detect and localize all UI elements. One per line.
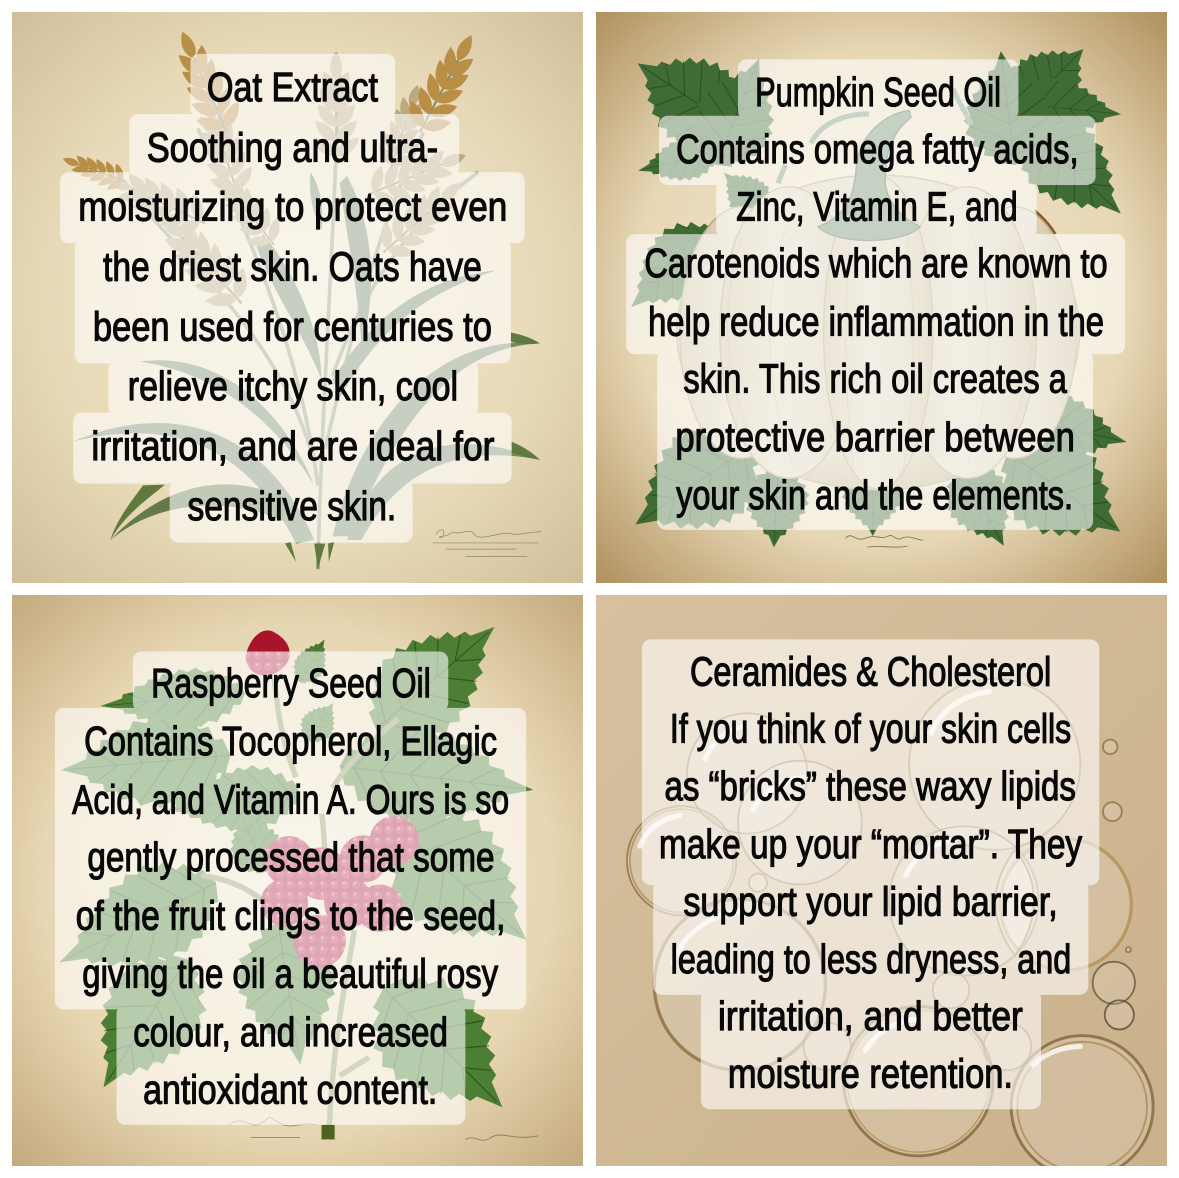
text: ceramides and cholesterol: as “bricks” these waxy lipids [664, 763, 1076, 809]
pumpkin body [677, 175, 1080, 490]
text: oat extract: the driest skin. Oats have [103, 244, 482, 290]
text: oat extract: relieve itchy skin, cool [128, 363, 458, 409]
text: raspberry seed oil: giving the oil a beautiful rosy [82, 951, 499, 997]
raspberries [261, 816, 419, 967]
panel: raspberry seed oil [12, 595, 583, 1166]
text: ceramides and cholesterol: support your lipid barrier, [683, 878, 1058, 924]
oat panel background [12, 12, 583, 583]
text: raspberry seed oil: of the fruit clings to the seed, [76, 892, 505, 938]
pumpkin stem [818, 110, 920, 241]
panel: oat extract [12, 12, 583, 583]
illustration: pumpkin and leaves [606, 23, 1150, 574]
raspberry panel background [12, 595, 583, 1166]
illustration: raspberry branch [37, 590, 565, 1147]
text: oat extract: moisturizing to protect even [78, 184, 507, 230]
text highlight [642, 639, 1099, 1109]
illustration: lipid bubbles [627, 679, 1153, 1178]
text: ceramides and cholesterol: moisture retention. [728, 1050, 1013, 1096]
text: raspberry seed oil: colour, and increased [133, 1009, 448, 1055]
panel: pumpkin seed oil [596, 12, 1167, 583]
text: oat extract: irritation, and are ideal for [91, 423, 495, 469]
text: pumpkin seed oil: Zinc, Vitamin E, and [736, 184, 1018, 230]
text highlight [55, 651, 526, 1125]
text: ceramides and cholesterol: If you think of your skin cells [670, 705, 1071, 751]
text: ceramides and cholesterol: leading to less dryness, and [671, 936, 1071, 982]
panel: ceramides and cholesterol [596, 595, 1167, 1166]
text: ceramides and cholesterol: irritation, and better [718, 993, 1023, 1039]
text: oat extract [78, 64, 507, 529]
text: pumpkin seed oil: protective barrier between [675, 414, 1075, 460]
text highlight [60, 54, 525, 543]
signature [845, 536, 923, 547]
illustration: oat plant [57, 21, 540, 569]
text: oat extract: been used for centuries to [93, 303, 492, 349]
text: ceramides and cholesterol: Ceramides & Cholesterol [690, 648, 1051, 694]
text: pumpkin seed oil: skin. This rich oil creates a [683, 356, 1067, 402]
text: ceramides and cholesterol [659, 648, 1083, 1096]
text: raspberry seed oil: gently processed that some [87, 834, 495, 880]
text: oat extract: Oat Extract [207, 64, 379, 110]
text: raspberry seed oil: Raspberry Seed Oil [151, 660, 431, 706]
text: pumpkin seed oil: your skin and the elements. [676, 472, 1073, 518]
ceramides panel background [596, 595, 1167, 1166]
signature [433, 530, 542, 556]
text: oat extract: Soothing and ultra- [147, 124, 438, 170]
text: pumpkin seed oil [644, 69, 1108, 518]
text: pumpkin seed oil: Pumpkin Seed Oil [755, 69, 1001, 115]
signatures [229, 1118, 538, 1140]
text: oat extract: sensitive skin. [188, 483, 396, 529]
text: raspberry seed oil: antioxidant content. [143, 1067, 437, 1113]
pumpkin panel background [596, 12, 1167, 583]
text highlight [626, 59, 1125, 530]
text: ceramides and cholesterol: make up your “mortar”. They [659, 821, 1083, 867]
text: raspberry seed oil: Contains Tocopherol, Ellagic [84, 718, 497, 764]
text: pumpkin seed oil: Contains omega fatty acids, [676, 126, 1079, 172]
text: raspberry seed oil [72, 660, 509, 1113]
